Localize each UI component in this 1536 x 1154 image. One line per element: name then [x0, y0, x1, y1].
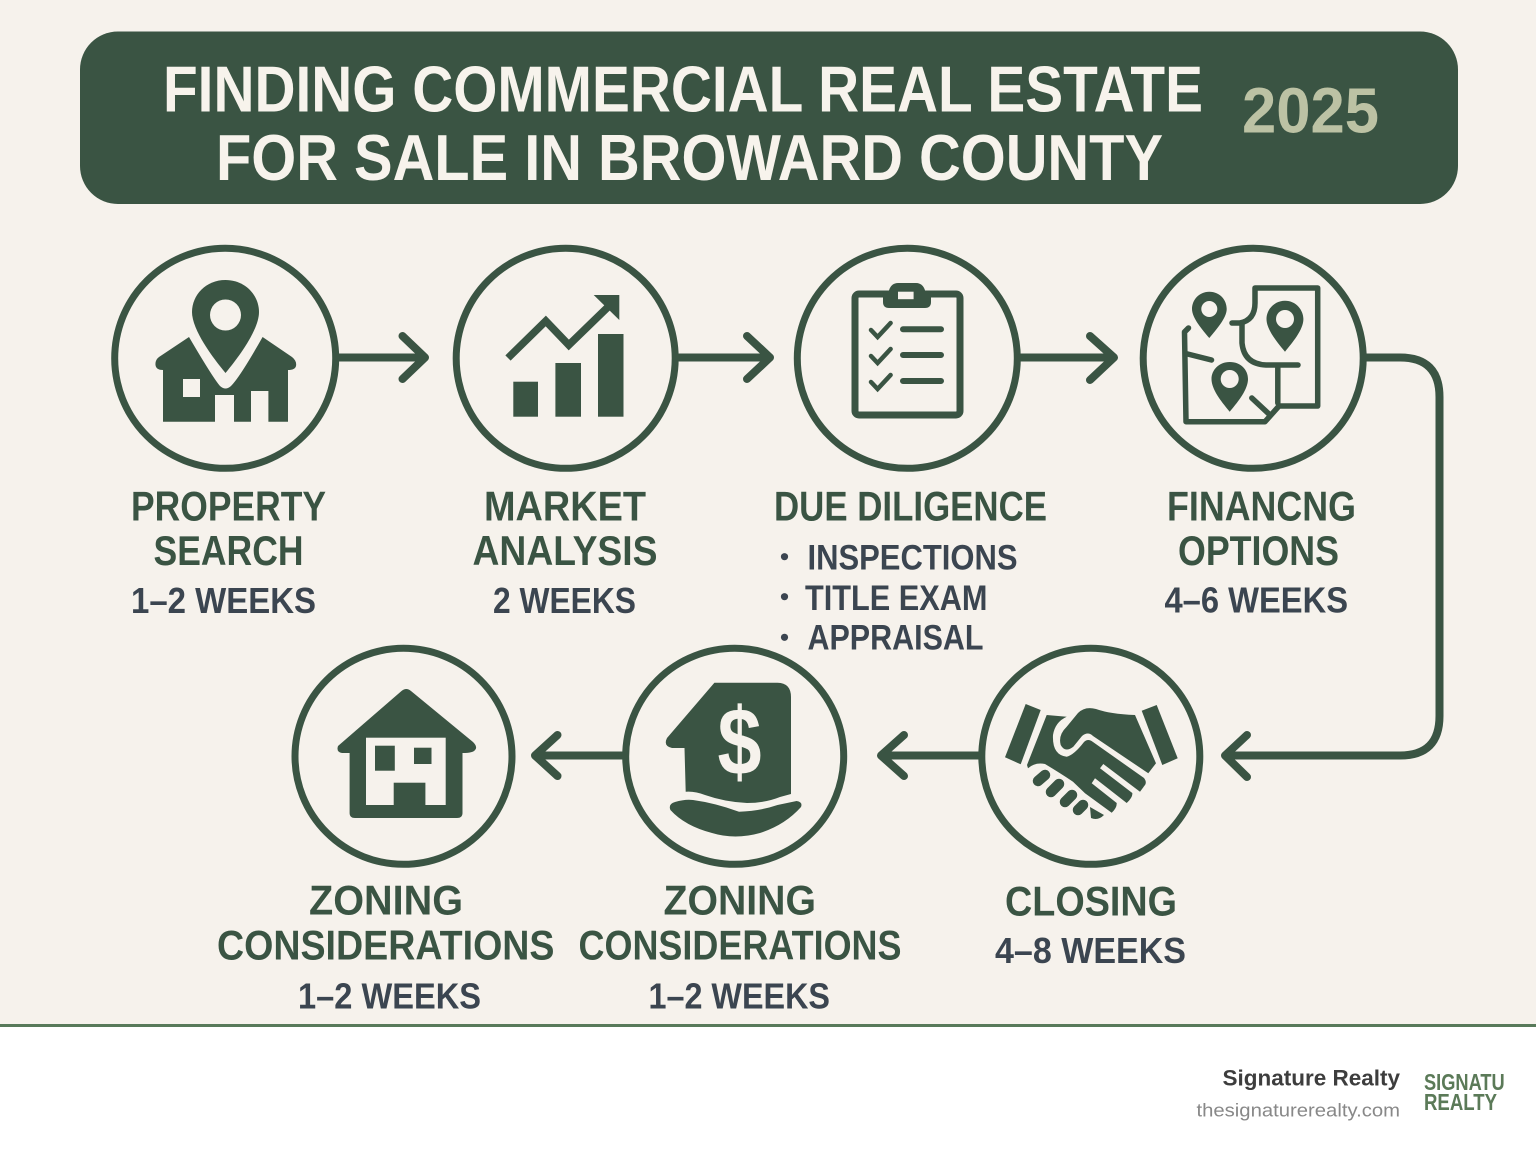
label: ZONING [664, 876, 816, 924]
label: ZONING [309, 876, 463, 924]
step: zoning considerations (dollar) [578, 648, 902, 1016]
footer logo [1424, 1074, 1504, 1110]
icon: house with dollar on hand: $ [718, 688, 762, 796]
step: closing [982, 648, 1200, 971]
footer brand name: Signature Realty [1222, 1066, 1401, 1091]
icon: house with location pin [115, 248, 336, 468]
label: MARKET [484, 482, 646, 530]
arrow: financing to closing [1225, 358, 1440, 777]
arrow: analysis to due diligence [679, 336, 770, 379]
label [472, 482, 658, 621]
icon: map with pins [1143, 248, 1363, 468]
title [163, 52, 1203, 194]
label: 1–2 WEEKS [648, 976, 830, 1016]
icon: rising bar chart [456, 248, 675, 468]
label [995, 878, 1186, 971]
label [1164, 482, 1356, 620]
label: DUE DILIGENCE [774, 482, 1047, 530]
footer website: thesignaturerealty.com [1196, 1101, 1400, 1121]
label: ANALYSIS [472, 527, 658, 574]
step: market analysis [456, 248, 675, 621]
step: due diligence [774, 248, 1047, 530]
label: CONSIDERATIONS [217, 922, 554, 968]
step: financing options [1143, 248, 1363, 620]
label: CONSIDERATIONS [578, 922, 902, 968]
due diligence checklist: TITLE EXAM [805, 579, 988, 618]
due diligence checklist: APPRAISAL [808, 618, 984, 658]
icon: house [295, 648, 512, 864]
label [578, 876, 902, 1016]
step: zoning considerations (house) [217, 648, 554, 1016]
arrow: closing to zoning [881, 735, 979, 776]
title banner [80, 32, 1458, 204]
icon: handshake [982, 648, 1200, 864]
label [131, 482, 326, 621]
label: 4–8 WEEKS [995, 930, 1186, 971]
footer logo: REALTY [1424, 1089, 1497, 1115]
label: OPTIONS [1178, 527, 1339, 574]
label: 1–2 WEEKS [298, 976, 481, 1016]
title: FINDING COMMERCIAL REAL ESTATE [163, 52, 1203, 126]
due diligence checklist [781, 538, 1018, 658]
arrow: due diligence to financing [1021, 336, 1114, 380]
arrow: search to analysis [339, 336, 425, 379]
title: FOR SALE IN BROWARD COUNTY [216, 121, 1163, 194]
due diligence checklist: INSPECTIONS [808, 538, 1018, 578]
icon: clipboard checklist [797, 248, 1017, 468]
footer [0, 1024, 1536, 1154]
label: 1–2 WEEKS [131, 580, 316, 621]
label: FINANCNG [1167, 482, 1356, 530]
year: 2025 [1242, 74, 1379, 146]
label [217, 876, 554, 1016]
icon: house with dollar on hand [626, 648, 844, 864]
arrow: dollar to house [535, 735, 622, 776]
label: PROPERTY [131, 482, 326, 530]
label: 2 WEEKS [493, 580, 636, 621]
label: 4–6 WEEKS [1164, 580, 1348, 620]
label: CLOSING [1005, 878, 1177, 924]
label: SEARCH [154, 527, 304, 574]
step: property search [115, 248, 336, 621]
